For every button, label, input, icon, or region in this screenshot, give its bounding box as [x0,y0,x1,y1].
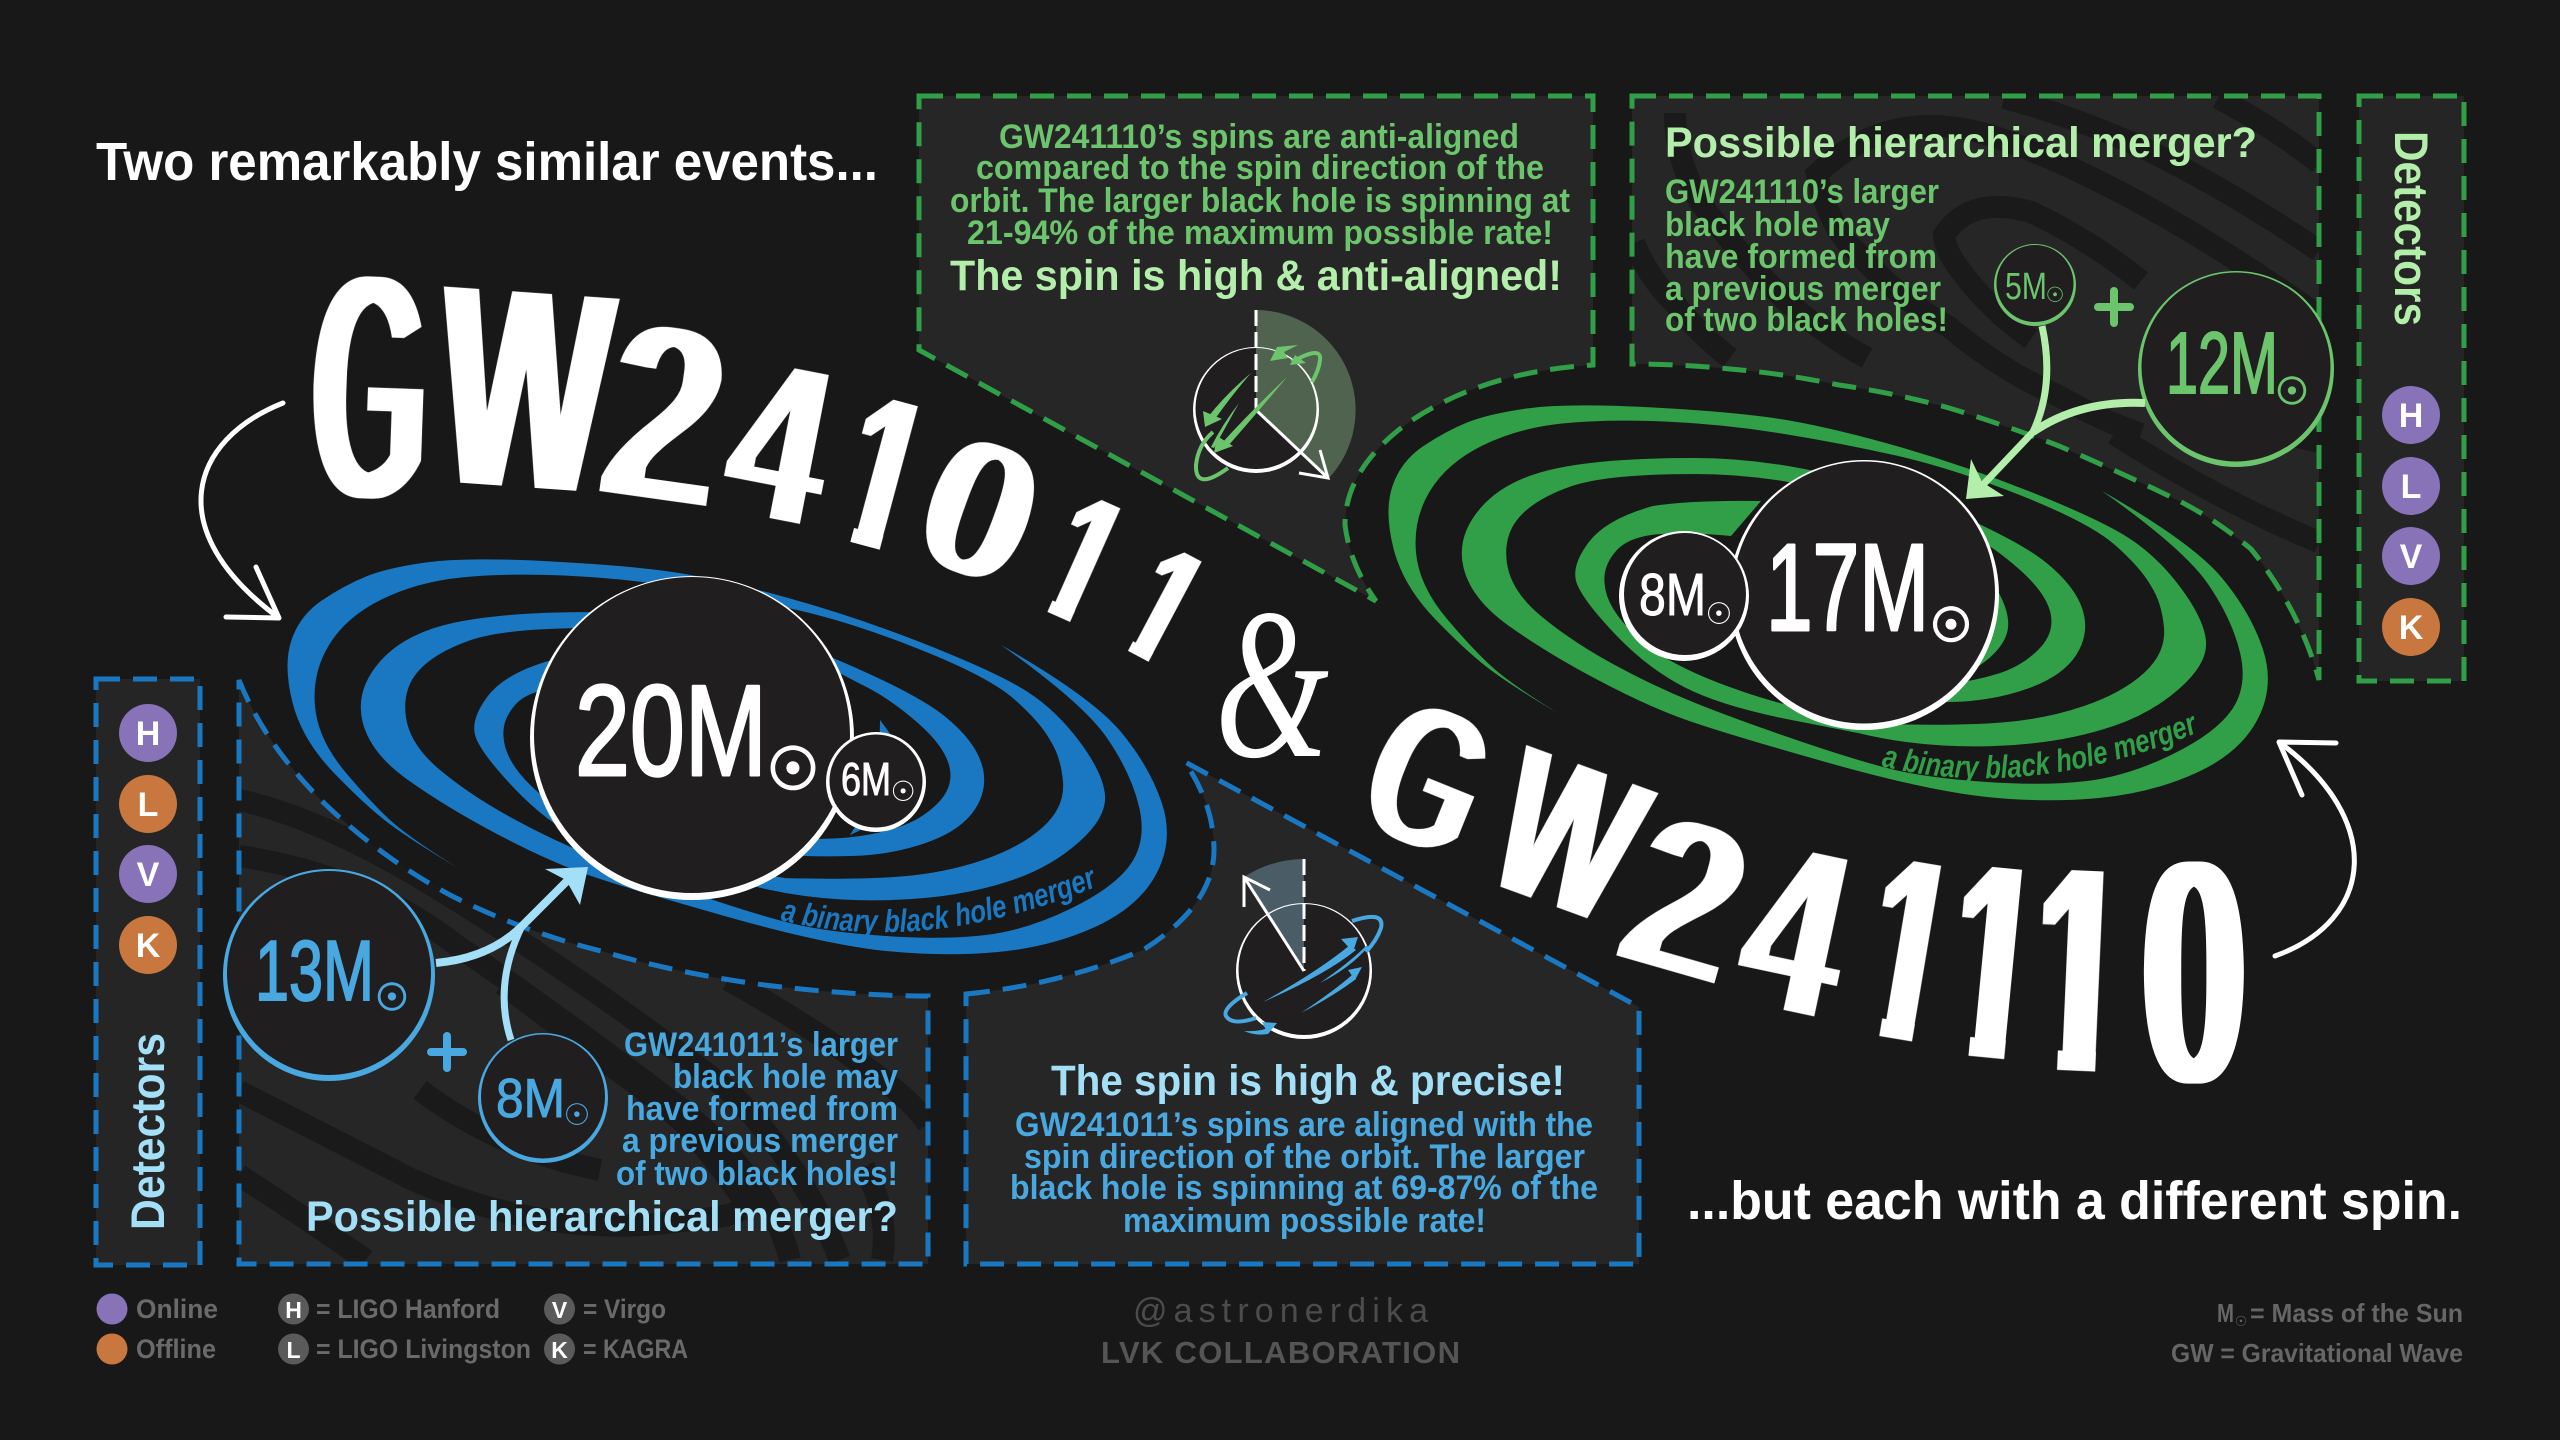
title: GW241110: 4 [1721,786,1872,1074]
black hole 5 solar masses [1994,244,2076,326]
detector L offline [119,775,177,833]
panel: GW241011 spin [966,762,1639,1264]
green spiral: binary black hole merger GW241110 [1388,405,2268,800]
detector H online: H [2399,397,2423,435]
title: GW241011: G [307,202,433,574]
detectors label: Detectors [121,1033,174,1230]
legend: detector status and keys: K [551,1337,568,1363]
legend: detector status and keys: Online [136,1294,218,1324]
title: GW241110: 1 [1938,797,2050,1130]
legend: detector status and keys [96,1294,688,1364]
spiral caption blue: a binary black hole merger [780,870,1094,935]
legend: abbreviations: M [2217,1298,2234,1328]
text: GW241011 hierarchical merger: have formed from [626,1090,898,1128]
detector K offline [2382,598,2440,656]
legend: detector status and keys: L [286,1337,301,1363]
black hole 20 solar masses: 20M [575,659,767,803]
black hole 8 solar masses white [1619,531,1749,661]
black hole 17 solar masses [1729,460,1999,730]
black hole 13 solar masses: 13M [255,924,374,1019]
credit: LVK COLLABORATION [1101,1335,1460,1370]
legend: detector status and keys: H [285,1297,302,1323]
black hole 5 solar masses: ☉ [2046,283,2064,307]
panel: GW241110 spin [919,96,1593,601]
text: GW241011 spin: black hole is spinning at 69-87% of the [1010,1169,1598,1207]
title: GW241011: 1 [1095,506,1234,704]
arrow: blue progenitors merge [436,867,588,1040]
text: GW241011 spin: maximum possible rate! [1123,1202,1486,1240]
text: GW241011 spin: The spin is high & precise! [1051,1057,1565,1105]
detector V online: V [2400,538,2423,576]
plus sign blue [431,1036,463,1068]
panel: GW241011 hierarchical merger [239,680,928,1264]
detector V online [2382,527,2440,585]
credit: @astronerdika [1133,1292,1428,1330]
text: GW241011 hierarchical merger: GW241011’s larger [624,1026,898,1064]
black hole 8 solar masses white: 8M [1639,562,1706,628]
black hole 17 solar masses: 17M [1766,520,1929,657]
text: GW241011 spin [1010,1057,1598,1240]
title: GW241011: 1 [816,342,950,607]
legend: detector status and keys: V [552,1297,568,1323]
title: GW241110: 1 [2029,795,2129,1144]
black hole 6 solar masses: ☉ [890,775,916,808]
text: GW241110 hierarchical merger: GW241110’s larger [1665,173,1939,211]
text: GW241110 spin: GW241110’s spins are anti-aligned [999,118,1519,156]
legend: detector status and keys: = Virgo [583,1294,666,1324]
black hole 20 solar masses: ☉ [767,735,819,803]
text: GW241110 hierarchical merger: black hole may [1665,206,1890,244]
detector K offline: K [136,927,161,965]
title: GW241110: W [1462,699,1674,974]
black hole 12 solar masses: ☉ [2275,370,2309,413]
detector V online [119,845,177,903]
black hole 6 solar masses [826,732,926,832]
title: GW241011: 4 [709,307,851,580]
title: GW241110: 0 [2142,787,2246,1157]
detector K offline: K [2399,609,2424,647]
panel: GW241110 detectors [2359,96,2464,681]
plus sign green [2098,291,2130,323]
black hole 5 solar masses: 5M [2005,266,2047,308]
detector V online: V [137,856,160,894]
legend: abbreviations: ☉ [2235,1314,2247,1330]
detector H online [119,704,177,762]
black hole 13 solar masses [223,869,435,1081]
arrow: green progenitors merge [1966,326,2145,499]
legend: detector status and keys: = KAGRA [583,1334,688,1364]
intro text: Two remarkably similar events... [96,132,878,192]
text: GW241110 spin: The spin is high & anti-aligned! [950,252,1562,300]
title: GW241011 [307,202,1234,704]
title: GW241011: 1 [1013,451,1153,669]
black hole 20 solar masses [530,576,854,900]
detector L online [2382,457,2440,515]
black hole 17 solar masses: ☉ [1930,598,1972,652]
arrow: GW241011 name to spiral [201,403,283,618]
blue spiral: binary black hole merger GW241011 [287,559,1167,954]
closing text: ...but each with a different spin. [1687,1171,2462,1231]
text: GW241011 spin: GW241011’s spins are aligned with the [1015,1106,1593,1144]
legend: detector status and keys: = LIGO Livingston [316,1334,531,1364]
text: GW241011 hierarchical merger [306,1026,898,1241]
title: GW241110: 2 [1599,761,1773,1035]
title: GW241011: W [429,218,621,562]
detector H online: H [136,715,160,753]
black hole 8 solar masses blue [478,1033,608,1163]
text: GW241110 spin: 21-94% of the maximum possible rate! [967,214,1553,252]
icon: GW241011 spin diagram [1225,859,1381,1039]
panel: GW241011 detectors [96,679,200,1265]
black hole 13 solar masses: ☉ [375,976,409,1019]
legend: detector status and keys: = LIGO Hanford [316,1294,500,1324]
black hole 8 solar masses blue: ☉ [564,1098,590,1133]
ampersand: & [1215,564,1329,803]
text: GW241110 spin [950,118,1570,300]
legend: abbreviations: = Mass of the Sun [2250,1298,2463,1328]
text: GW241110 spin: compared to the spin direction of the [976,149,1544,187]
panel: GW241110 hierarchical merger [1632,96,2319,680]
spiral caption green: a binary black hole merger [1882,716,2194,781]
credit [1101,1292,1460,1370]
black hole 8 solar masses blue: 8M [496,1067,565,1129]
title: GW241011: 0 [892,387,1068,633]
detector K offline [119,916,177,974]
detector L offline: L [138,786,158,824]
text: GW241011 hierarchical merger: black hole may [673,1058,898,1096]
text: GW241110 hierarchical merger [1665,119,2257,339]
text: GW241011 hierarchical merger: of two black holes! [616,1155,898,1193]
text: GW241011 spin: spin direction of the orbit. The larger [1024,1138,1585,1176]
text: GW241110 hierarchical merger: a previous merger [1665,270,1941,308]
text: GW241110 hierarchical merger: have formed from [1665,238,1937,276]
legend: abbreviations: GW = Gravitational Wave [2171,1338,2463,1368]
title: GW241011: 2 [589,262,741,567]
text: GW241110 hierarchical merger: Possible hierarchical merger? [1665,119,2257,167]
detector H online [2382,386,2440,444]
black hole 8 solar masses white: ☉ [1706,597,1732,632]
black hole 12 solar masses [2138,271,2334,467]
text: GW241110 spin: orbit. The larger black hole is spinning at [950,182,1570,220]
black hole 6 solar masses: 6M [841,753,891,805]
text: GW241011 hierarchical merger: a previous merger [622,1122,898,1160]
detector L online: L [2401,468,2421,506]
title: GW241110 [1370,708,2244,1084]
legend: detector status and keys: Offline [136,1334,216,1364]
detectors label: Detectors [2385,131,2438,326]
text: GW241110 hierarchical merger: of two black holes! [1665,301,1948,339]
title: GW241110: G [1334,651,1522,905]
text: GW241011 hierarchical merger: Possible hierarchical merger? [306,1193,898,1241]
title: GW241110: 1 [1846,793,1972,1107]
legend: abbreviations [2171,1298,2463,1368]
icon: GW241110 spin diagram [1193,310,1356,479]
black hole 12 solar masses: 12M [2166,315,2278,412]
arrow: GW241110 name to spiral [2275,742,2354,956]
